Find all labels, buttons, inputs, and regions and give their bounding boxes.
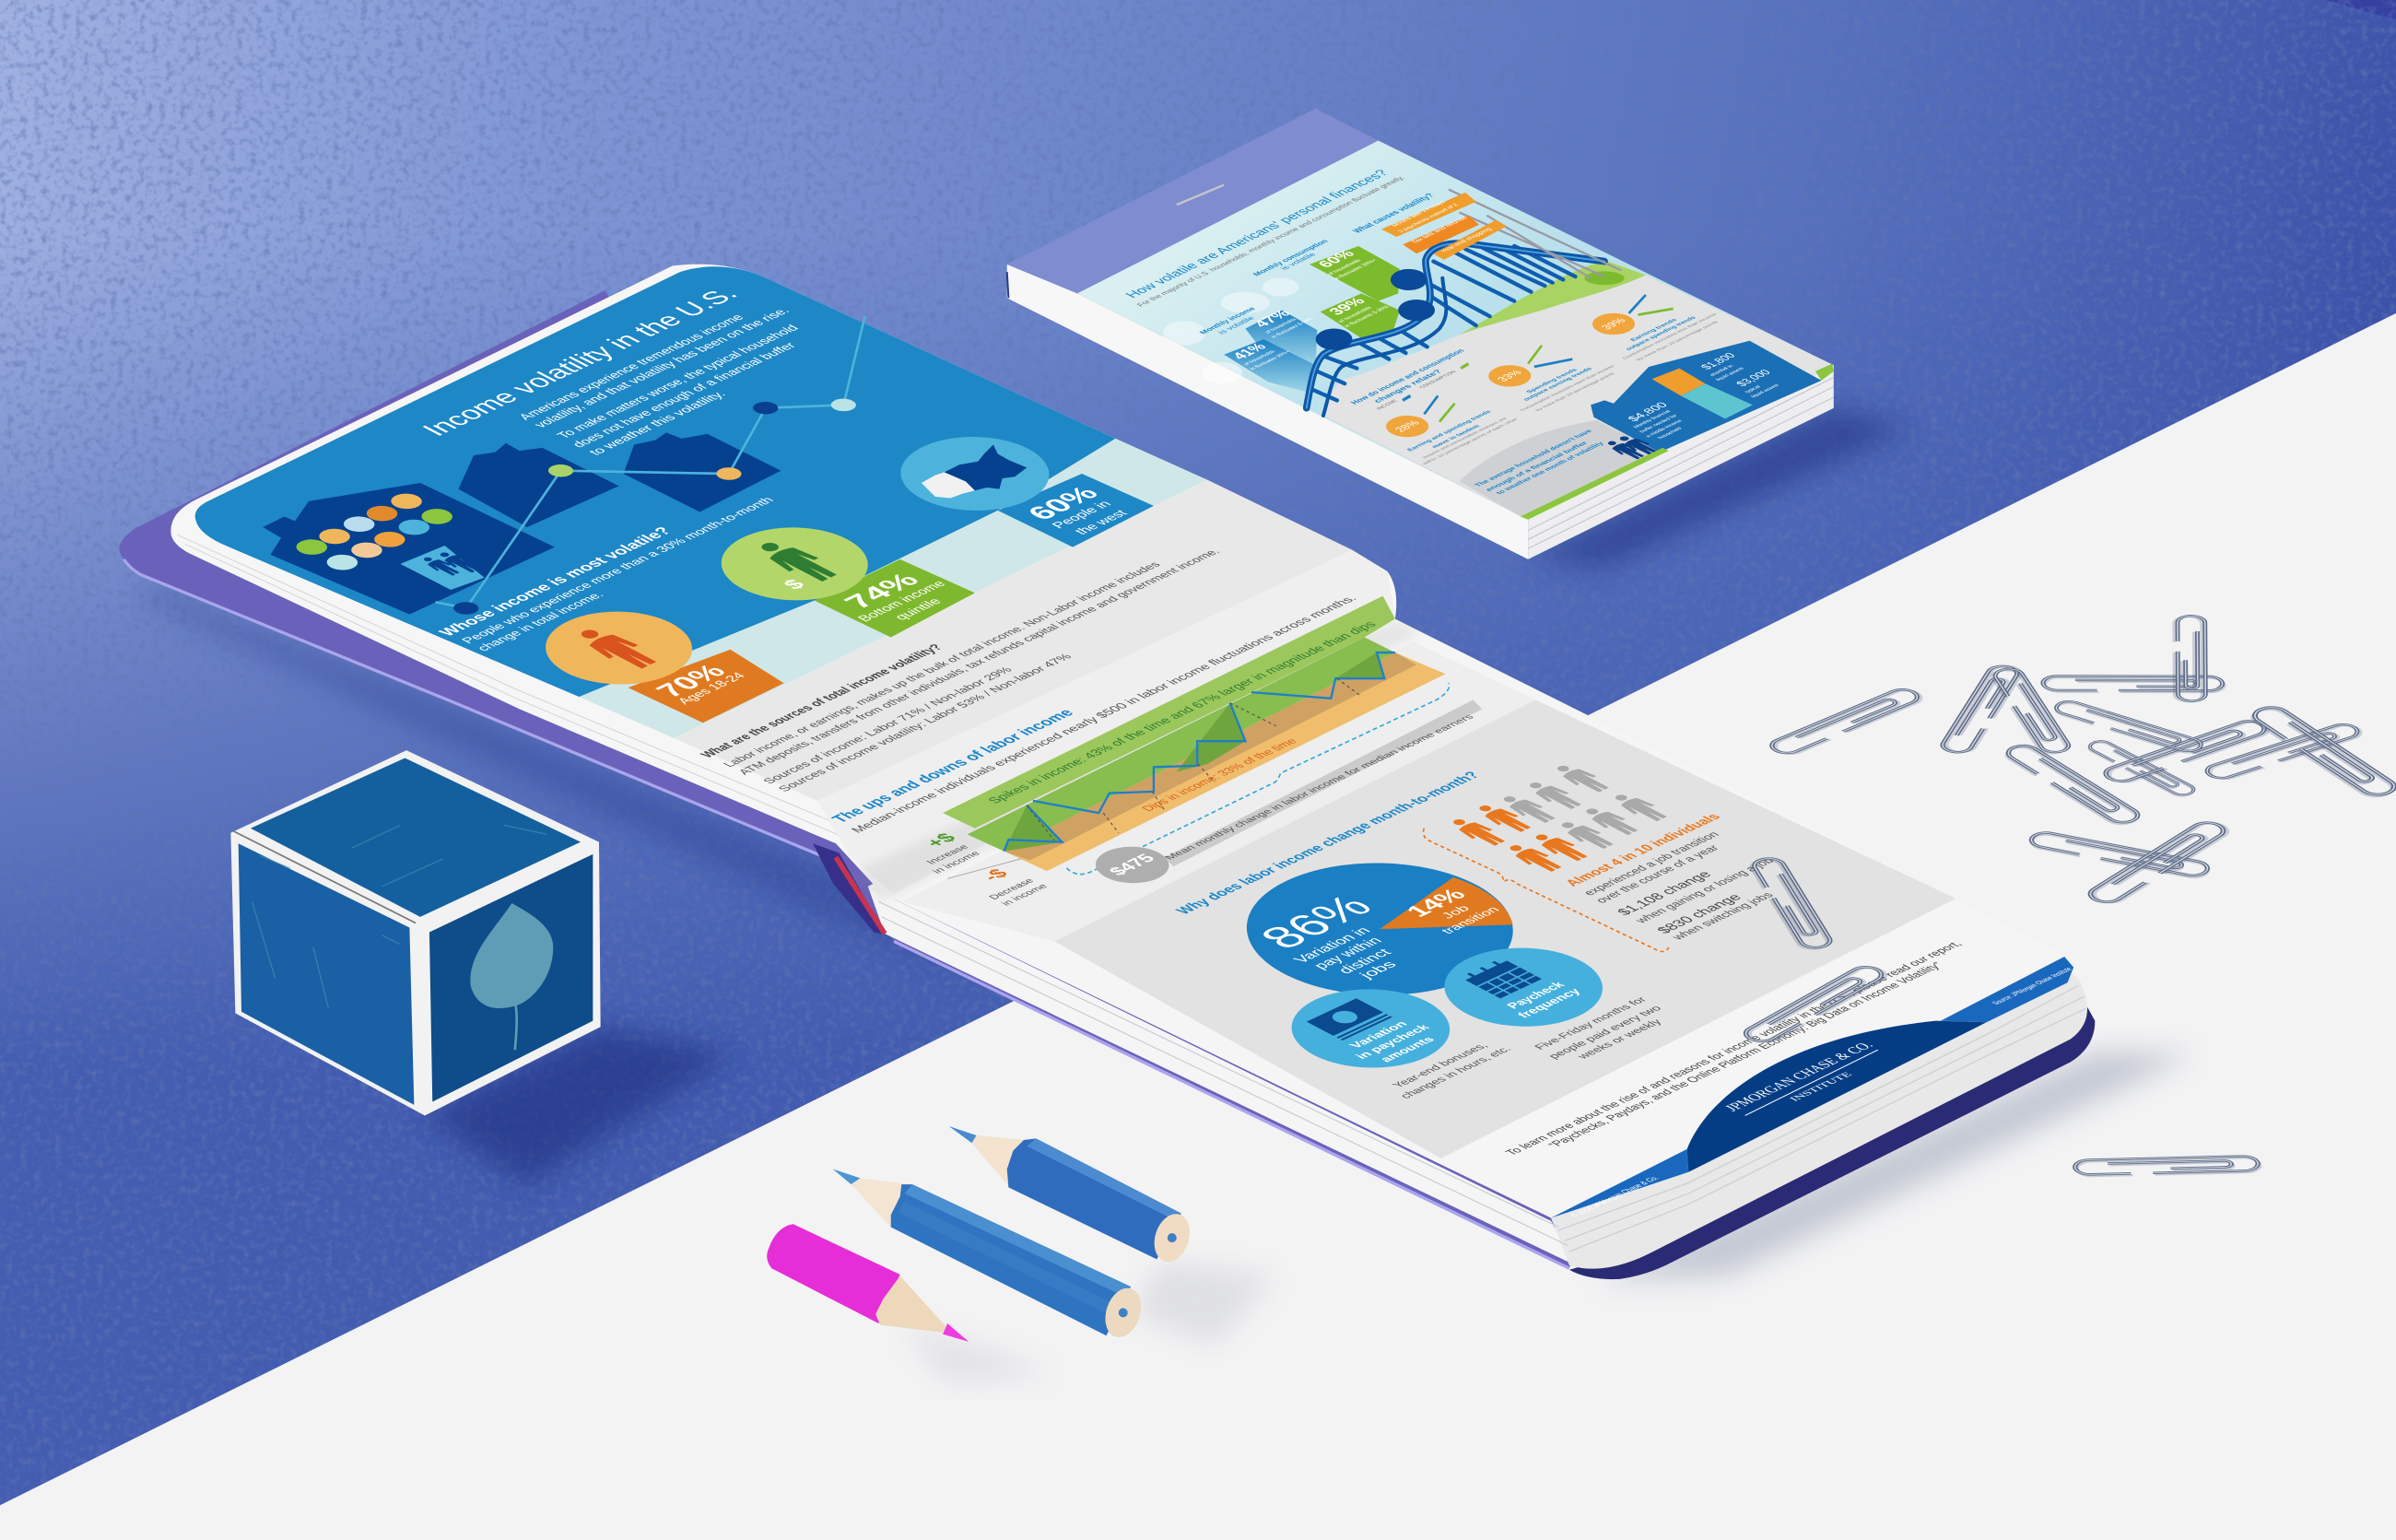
lower page grey panel xyxy=(1054,699,1956,1158)
booklet family icon xyxy=(1603,433,1663,461)
job transition statistics xyxy=(1562,812,1777,942)
chart dashed bracket xyxy=(1066,683,1449,875)
pictogram: 4 in 10 individuals xyxy=(1445,762,1672,874)
family window in the big house xyxy=(400,546,485,590)
booklet buffer statement: enough of a financial buffer xyxy=(1483,441,1590,492)
chart legend: decrease in income: -$ xyxy=(978,866,1013,884)
chart: spikes and dips in income xyxy=(921,596,1482,907)
chart dashed drop lines xyxy=(1027,678,1360,841)
job transition statistics: when switching jobs xyxy=(1668,890,1777,942)
booklet column labels: Monthly income xyxy=(1197,305,1258,335)
bubble: paycheck frequency: Paycheck xyxy=(1503,980,1568,1010)
booklet blue stat boxes: of households xyxy=(1243,349,1277,367)
booklet green stat boxes xyxy=(1310,246,1400,342)
booklet flags and poles: Tax bills and refunds xyxy=(1411,216,1470,244)
footer band: © 2016 JPMorgan Chase & Co. xyxy=(1568,1175,1661,1218)
intro text: Americans experience tremendous income xyxy=(516,312,747,422)
chart legend: decrease in income: Decrease xyxy=(987,877,1037,901)
section heading: whose income is most volatile: change in total income. xyxy=(474,590,606,652)
booklet stat: 28 percent: move in tandem xyxy=(1430,424,1482,449)
pie chart: causes of change: Job xyxy=(1438,903,1473,921)
stat: people in the west xyxy=(870,422,1154,547)
booklet subheading: For the majority of U.S. households, monthly income and consumption fluctuate greatly. xyxy=(1134,174,1406,308)
pie chart: causes of change: transition xyxy=(1438,904,1502,935)
cube white frame xyxy=(230,750,601,1115)
booklet coaster cars xyxy=(1316,269,1435,350)
booklet clouds xyxy=(1163,278,1298,383)
booklet grey dome xyxy=(1460,420,1660,516)
main book: purple cover and paper edges xyxy=(119,290,2095,1279)
booklet stat: 39 percent: outpace spending trends xyxy=(1625,315,1698,351)
booklet blue stat boxes: 47% xyxy=(1250,307,1295,329)
chart lower green band xyxy=(968,637,1395,852)
booklet stat: 28 percent: within 10 percentage points of each other xyxy=(1421,417,1521,465)
sources of total income text: Sources of income: Labor 71% / Non-labor 29% xyxy=(759,664,1015,785)
booklet stat: 33 percent: Spending trends xyxy=(1525,368,1580,394)
booklet blue house with buffer figures: Monthly financial xyxy=(1633,410,1673,429)
booklet income and consumption section: INCOME xyxy=(1376,399,1400,411)
caption: five-friday months: people paid every two xyxy=(1545,1004,1664,1061)
paper clips lying on the book xyxy=(1740,857,1892,1045)
cube lid seam xyxy=(234,831,416,923)
chart mean badge: $475 xyxy=(1105,852,1159,878)
booklet blue stat boxes: of households xyxy=(1264,318,1298,335)
booklet heading: How volatile are Americans' personal finances? xyxy=(1122,168,1392,300)
bubble: variation in paycheck amounts: amounts xyxy=(1377,1035,1438,1064)
booklet blue house with buffer figures: typical xyxy=(1744,385,1762,394)
stat: bottom income quintile: Bottom income xyxy=(855,579,949,624)
pencil: short magenta xyxy=(767,1224,969,1342)
pie chart: causes of change: 86% xyxy=(1248,888,1384,955)
booklet stat: 33 percent: 33% xyxy=(1495,369,1525,383)
booklet page: sky background xyxy=(1077,141,1834,520)
cube right face xyxy=(429,854,593,1102)
booklet column labels: is volatile xyxy=(1278,252,1318,271)
icon: US map xyxy=(922,445,1027,499)
booklet blue house with buffer figures: $3,000 xyxy=(1733,368,1774,388)
intro text: volatility, and that volatility has been on the rise. xyxy=(532,306,793,429)
spine fold shadow xyxy=(850,620,1421,901)
booklet flags and poles: Year-end shopping xyxy=(1439,227,1494,253)
pie chart: causes of change: 14% xyxy=(1400,885,1472,920)
job transition statistics: experienced a job transition xyxy=(1580,829,1722,897)
stat: ages 18-24 xyxy=(515,596,784,723)
pie chart: causes of change: pay within xyxy=(1310,935,1386,971)
sources of total income text: What are the sources of total income volatility? xyxy=(698,642,946,759)
booklet column labels: is volatile xyxy=(1216,315,1257,335)
booklet green stat boxes: 39% xyxy=(1324,295,1369,317)
intro text: does not have enough of a financial buffer xyxy=(570,341,800,450)
bubble: variation in paycheck amounts: Variation xyxy=(1346,1019,1410,1050)
chart mean change label: Mean monthly change in labor income for median income earners xyxy=(1163,713,1477,862)
booklet green corner xyxy=(1815,364,1834,381)
booklet blue house with buffer figures xyxy=(1591,341,1822,453)
booklet roller coaster xyxy=(1307,243,1604,416)
intro text: to weather this volatility. xyxy=(586,390,729,457)
footer band: INSTITUTE xyxy=(1788,1071,1855,1103)
section heading: whose income is most volatile: People who experience more than a 30% month-to-month xyxy=(458,495,777,645)
pie chart: causes of change xyxy=(1192,836,1568,1022)
booklet blue house with buffer figures: $1,800 xyxy=(1698,351,1739,371)
stat: people in the west: the west xyxy=(1073,508,1132,536)
upper page lighter band above the fold xyxy=(817,550,1395,894)
booklet flags and poles xyxy=(1381,190,1621,278)
booklet flags and poles: Months with 3 Fridays – xyxy=(1391,197,1452,228)
pie chart: causes of change: Variation in xyxy=(1289,924,1374,965)
booklet income and consumption section: changes relate? xyxy=(1371,369,1444,404)
section heading: the ups and downs of labor income: Median-income individuals experienced nearly $500 in labor income fluctuations across months. xyxy=(848,594,1359,834)
pencil: short blue xyxy=(949,1126,1195,1266)
stat: ages 18-24: 70% xyxy=(649,660,733,701)
pie chart: causes of change: distinct xyxy=(1333,946,1395,976)
chart legend: increase in income: Increase xyxy=(924,843,971,866)
booklet column labels xyxy=(1197,193,1437,335)
booklet purple binding band xyxy=(1007,109,1379,293)
booklet buffer statement: The average household doesn't have xyxy=(1473,429,1594,488)
bubble: variation in paycheck amounts: in paycheck xyxy=(1352,1022,1433,1061)
booklet blue house with buffer figures: household xyxy=(1657,427,1684,440)
booklet buffer statement: to weather one month of volatility xyxy=(1494,441,1606,496)
booklet blue house with buffer figures: $4,800 xyxy=(1625,401,1671,423)
upper page grey text panel xyxy=(674,480,1352,801)
chart monthly income line xyxy=(1004,652,1395,852)
booklet stat: 33 percent xyxy=(1480,346,1617,412)
booklet income and consumption section: How do income and consumption xyxy=(1348,347,1466,406)
booklet income and consumption section: CONSUMPTION xyxy=(1418,370,1458,390)
chart mean change strip xyxy=(1165,699,1482,866)
intro text: To make matters worse, the typical household xyxy=(554,323,803,441)
stat: ages 18-24: Ages 18-24 xyxy=(675,671,749,706)
paper clip upright on page xyxy=(1747,857,1835,950)
cube: cyanotype box with leaf xyxy=(230,750,601,1115)
booklet stat: 39 percent: Earning trends xyxy=(1629,318,1679,342)
stat: bottom income quintile: quintile xyxy=(892,596,945,622)
booklet blue house with buffer figures: buffer needed for xyxy=(1638,414,1679,434)
stat: bottom income quintile xyxy=(691,512,975,637)
chart darker folds under the spikes xyxy=(1004,652,1384,852)
shadows cast by the objects xyxy=(141,408,2192,1383)
booklet stat: 33 percent: by more than 10 percentage points xyxy=(1534,371,1617,412)
booklet green edge strips xyxy=(1521,448,1669,520)
bubble: variation in paycheck amounts xyxy=(1259,973,1483,1084)
stat: people in the west: 60% xyxy=(1020,482,1106,524)
chart mean badge xyxy=(1080,840,1184,890)
chart dips label: Dips in income: 33% of the time xyxy=(1138,736,1300,813)
icon: graduate figure xyxy=(570,624,664,672)
closing note: “Paychecks, Paydays, and the Online Platform Economy: Big Data on Income Volatility” xyxy=(1544,960,1945,1149)
pencil: long blue xyxy=(833,1169,1147,1342)
icon: person with dollar sign xyxy=(750,537,844,585)
chart legend: decrease in income: in income xyxy=(999,883,1051,907)
booklet stat: 39 percent xyxy=(1583,295,1721,361)
upper page of the book xyxy=(170,265,1421,901)
stat: bottom income quintile: $ xyxy=(778,576,810,593)
chart legend: decrease in income xyxy=(978,866,1051,907)
bubble: paycheck frequency: frequency xyxy=(1514,986,1584,1019)
cube top face xyxy=(251,758,581,917)
booklet green stat boxes: of households xyxy=(1338,306,1373,323)
job transition statistics: Almost 4 in 10 individuals xyxy=(1562,812,1724,888)
booklet blue stat boxes: in fluctuates 5-30% xyxy=(1271,317,1315,339)
booklet green stat boxes: of households xyxy=(1327,259,1363,276)
booklet side paper stacks xyxy=(1007,265,1834,559)
chart legend: increase in income xyxy=(921,830,983,876)
footer band xyxy=(1551,957,2074,1218)
lower page chart panel background xyxy=(901,641,1535,941)
icon: banknotes xyxy=(1307,998,1392,1040)
booklet green hill xyxy=(1460,262,1646,335)
chart brown overlap band xyxy=(1004,652,1416,861)
lower page of the book xyxy=(868,619,2074,1218)
caption: five-friday months: Five-Friday months for xyxy=(1532,995,1650,1052)
lower page paper xyxy=(868,619,2073,1218)
sources of total income text: ATM deposits, transfers from other individuals, tax refunds capital income and government income. xyxy=(735,547,1223,776)
job transition statistics: $830 change xyxy=(1654,892,1745,935)
closing note: To learn more about the rise of and reasons for income volatility in the U.S., please read our report, xyxy=(1502,939,1965,1157)
chart upper green strip on the curled page xyxy=(943,596,1395,829)
coloured budget dots in the big house xyxy=(290,490,459,573)
booklet stat: 28 percent: Earning and spending trends xyxy=(1406,409,1493,453)
paper clip over closing note xyxy=(1740,963,1892,1045)
booklet column labels: What causes volatility? xyxy=(1351,193,1437,235)
dashed orange bracket xyxy=(1423,829,1669,951)
chart legend: increase in income: +$ xyxy=(921,830,961,850)
booklet blue house with buffer figures: a middle-income xyxy=(1645,419,1684,439)
booklet column labels: Monthly consumption xyxy=(1251,238,1330,277)
sources of total income text: Labor income, or earnings, makes up the bulk of total income. Non-Labor income includes xyxy=(720,559,1163,769)
chart legend: increase in income: in income xyxy=(930,850,983,876)
caption: year-end bonuses: changes in hours, etc. xyxy=(1397,1044,1514,1100)
booklet blue stat boxes: in fluctuates 30%+ xyxy=(1249,350,1292,371)
job transition statistics: $1,108 change xyxy=(1615,869,1716,917)
booklet staple xyxy=(1177,185,1224,205)
stat: bottom income quintile: 74% xyxy=(837,569,926,613)
line chart over the houses xyxy=(436,316,865,617)
chart spikes label: Spikes in income: 43% of the time and 67% larger in magnitude than dips xyxy=(985,619,1380,805)
main title: Income volatility in the U.S. xyxy=(416,284,745,440)
cube left face xyxy=(239,843,414,1105)
booklet green stat boxes: in fluctuates 30%+ xyxy=(1333,258,1379,281)
booklet stat: 33 percent: outpace earning trends xyxy=(1522,367,1594,402)
booklet stat: 39 percent: Consumption increases less than income xyxy=(1622,312,1719,360)
booklet stat: 39 percent: by more than 10 percentage points xyxy=(1635,320,1721,361)
upper page blue header xyxy=(195,266,1115,697)
pie chart: causes of change: jobs xyxy=(1355,958,1401,981)
stat: people in the west: People in xyxy=(1050,500,1115,531)
caption: year-end bonuses: Year-end bonuses, xyxy=(1390,1041,1491,1089)
upper page pale staircase band xyxy=(579,439,1207,738)
caption: five-friday months: weeks or weekly xyxy=(1573,1017,1665,1061)
section heading: the ups and downs of labor income: The ups and downs of labor income xyxy=(828,707,1077,825)
booklet green stat boxes: 60% xyxy=(1314,248,1358,270)
footer band: Source: JPMorgan Chase Institute xyxy=(1991,966,2074,1005)
booklet flags and poles: 3 paychecks instead of 2 xyxy=(1397,203,1461,234)
background: dark corner sliver xyxy=(2326,0,2396,20)
booklet blue stat boxes xyxy=(1224,307,1317,393)
footer band: JPMORGAN CHASE & CO. xyxy=(1721,1040,1877,1113)
booklet green stat boxes: in fluctuates 5-30% xyxy=(1344,305,1392,328)
chart orange dips band xyxy=(1004,652,1446,871)
booklet blue house with buffer figures: shortfall in xyxy=(1709,364,1735,377)
booklet blue house with buffer figures: liquid assets xyxy=(1750,383,1781,398)
booklet stat: 28 percent xyxy=(1378,395,1521,465)
icon: leaf xyxy=(470,903,553,1050)
sources of total income text: Sources of income volatility: Labor 53% / Non-labor 47% xyxy=(775,652,1075,794)
booklet grey lower panel xyxy=(1323,275,1834,520)
job transition statistics: over the course of a year xyxy=(1592,843,1722,905)
booklet: small infographic notepad xyxy=(1007,109,1834,559)
upper page paper xyxy=(170,265,1396,901)
booklet stat: 28 percent: Income and consumption changes are xyxy=(1421,417,1509,460)
bubble: paycheck frequency xyxy=(1412,932,1636,1042)
job transition statistics: when gaining or losing a job xyxy=(1631,856,1777,925)
booklet stat: 28 percent: 28% xyxy=(1392,419,1422,434)
section heading: whose income is most volatile: Whose income is most volatile? xyxy=(435,524,675,639)
booklet stat: 39 percent: 39% xyxy=(1599,317,1628,332)
booklet blue house with buffer figures: liquid assets xyxy=(1715,367,1745,382)
booklet blue stat boxes: 41% xyxy=(1228,341,1271,361)
icon: calendar xyxy=(1460,958,1542,998)
paper clips on the desk xyxy=(1766,616,2396,1177)
section heading: why does labor income change: Why does labor income change month-to-month? xyxy=(1172,770,1484,916)
houses in the header xyxy=(263,432,781,615)
booklet stat: 33 percent: Consumption increases more than income xyxy=(1519,364,1616,412)
